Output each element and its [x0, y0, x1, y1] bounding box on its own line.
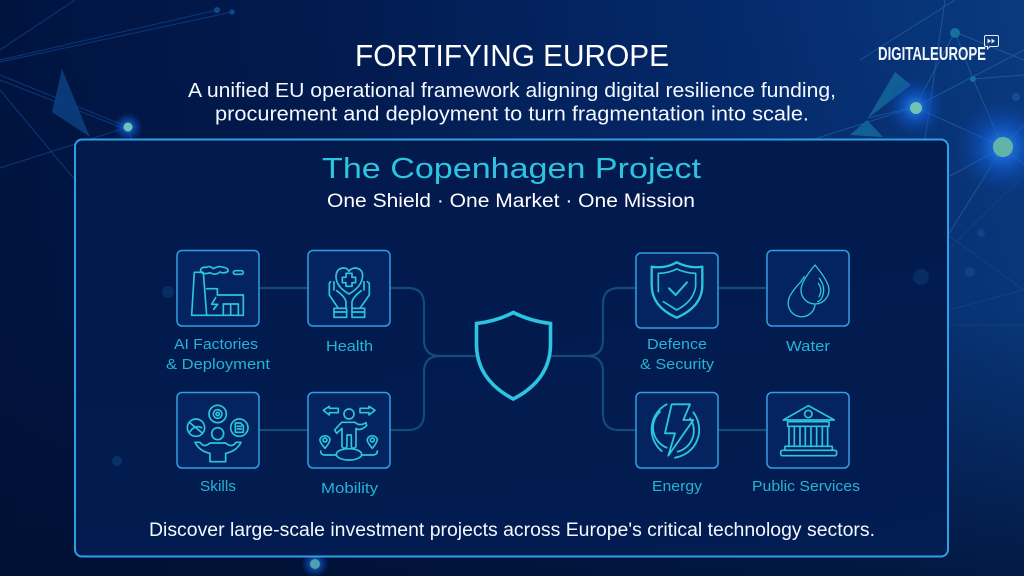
icon: central shield: [476, 312, 550, 399]
label: [166, 336, 271, 373]
label: [640, 336, 715, 373]
icon: lightning energy: [652, 404, 699, 458]
label: Health: [326, 338, 373, 355]
panel tagline: One Shield · One Market · One Mission: [327, 191, 695, 212]
icon: check shield: [652, 262, 702, 318]
icon: water drops: [788, 265, 829, 317]
label: Mobility: [321, 480, 379, 497]
icon: heart in hands: [329, 268, 369, 317]
card: Mobility: [308, 392, 390, 497]
subtitle: [188, 79, 836, 126]
icon: person with directions: [320, 406, 377, 460]
icon: factory: [192, 267, 243, 315]
panel heading: The Copenhagen Project: [322, 153, 701, 185]
label: Water: [786, 338, 830, 355]
label: & Deployment: [166, 356, 271, 373]
connector lines: [259, 288, 767, 430]
footer statement: Discover large-scale investment projects across Europe's critical technology sectors.: [149, 520, 875, 541]
logo: DIGITALEUROPE: DIGITALEUROPE: [878, 44, 986, 64]
label: & Security: [640, 356, 715, 373]
card: Skills: [177, 392, 259, 495]
card: Public Services: [752, 392, 860, 495]
logo: DIGITALEUROPE: [878, 36, 998, 64]
icon: person juggling skills: [187, 405, 248, 462]
label: Skills: [200, 478, 236, 495]
subtitle: procurement and deployment to turn fragmentation into scale.: [215, 102, 809, 126]
title: FORTIFYING EUROPE: [355, 38, 669, 73]
card: Energy: [636, 392, 718, 495]
icon: public building: [781, 406, 837, 456]
label: Public Services: [752, 478, 860, 495]
subtitle: A unified EU operational framework aligning digital resilience funding,: [188, 79, 836, 102]
card: Water: [767, 250, 849, 355]
panel: The Copenhagen Project: [75, 140, 948, 556]
label: AI Factories: [174, 336, 258, 353]
card: AI Factories & Deployment: [166, 250, 271, 373]
label: Defence: [647, 336, 707, 353]
label: Energy: [652, 478, 703, 495]
card: Health: [308, 250, 390, 355]
card: Defence & Security: [636, 253, 718, 373]
